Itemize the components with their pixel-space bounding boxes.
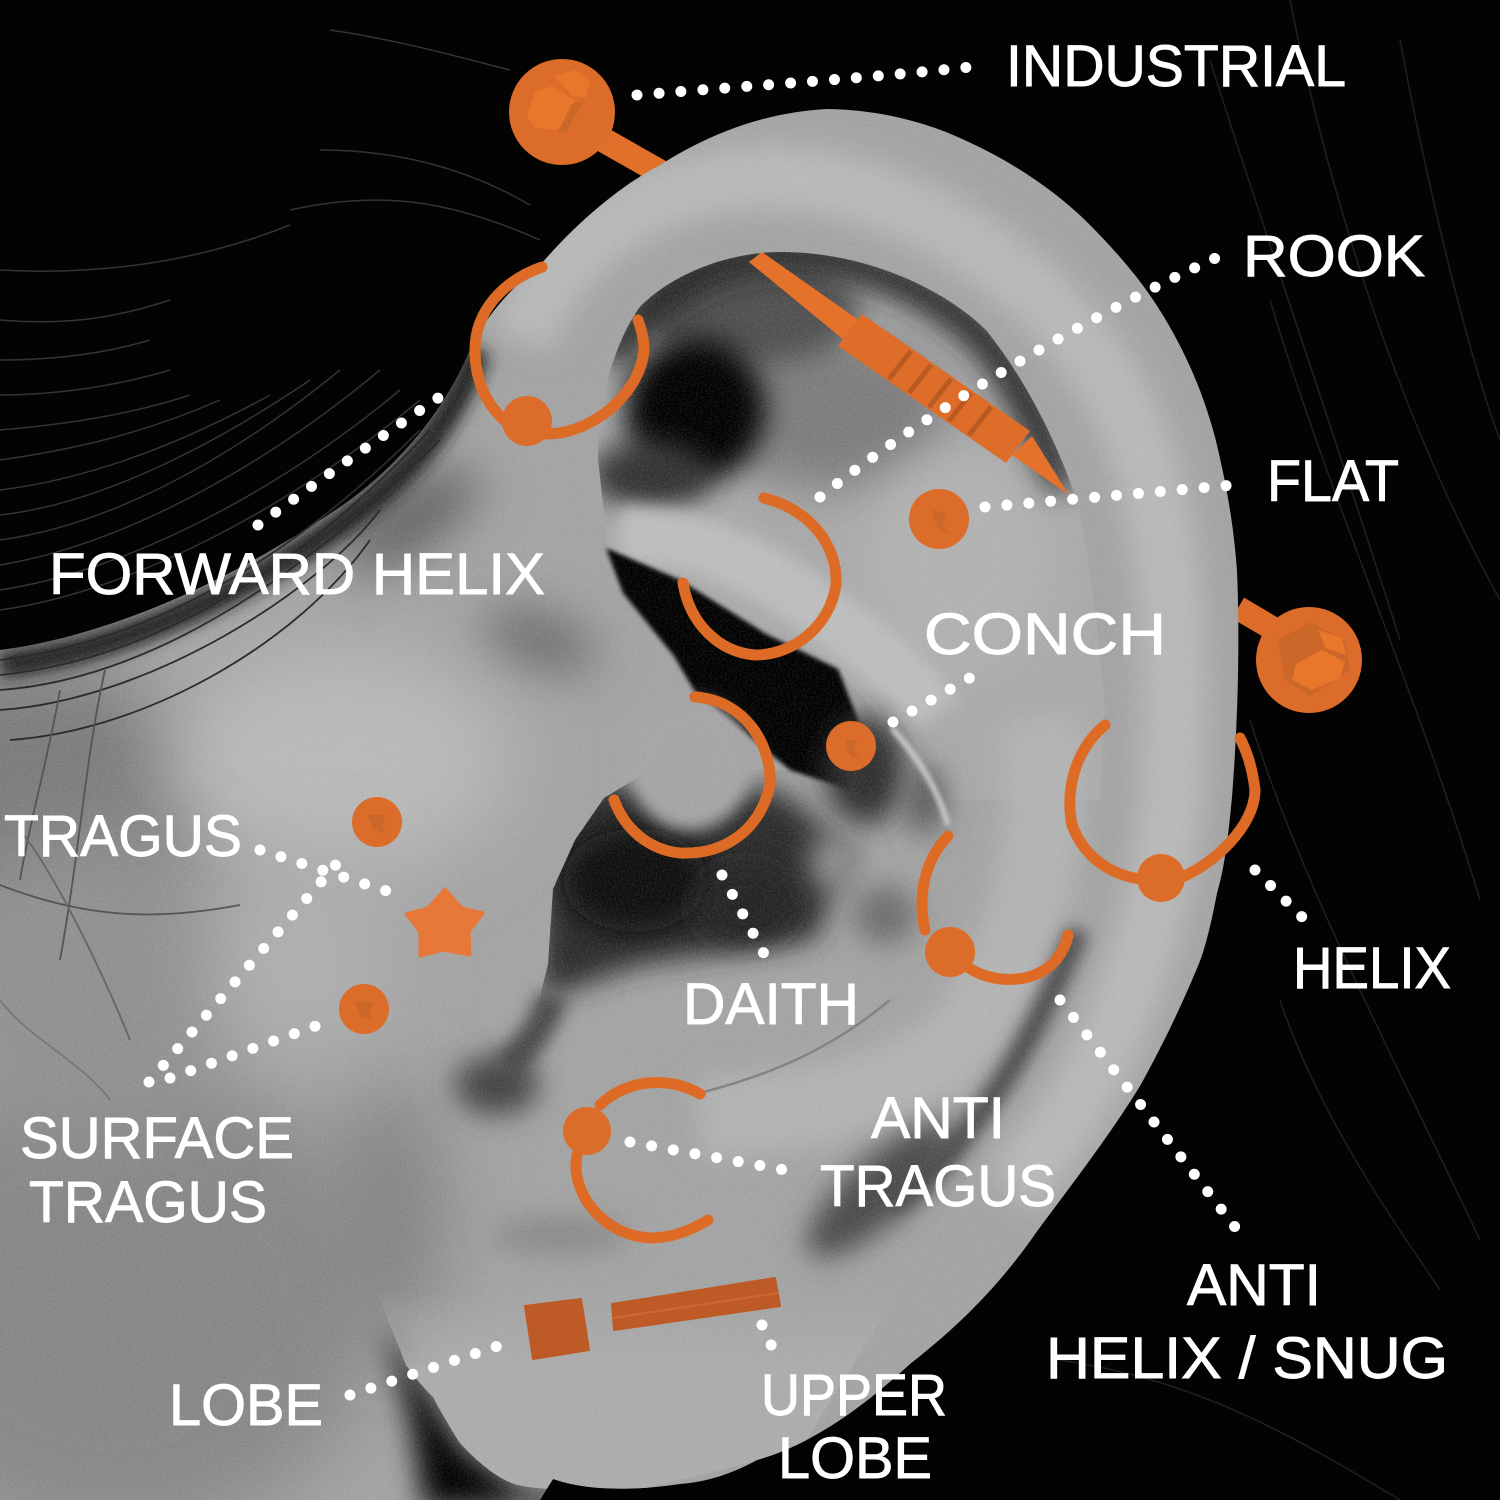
tip (1012, 436, 1069, 495)
label: anti helix / snug: ANTI (1187, 1253, 1321, 1318)
label: upper lobe: LOBE (778, 1426, 932, 1491)
ear and face skin (0, 109, 1238, 1500)
label: anti helix / snug (1046, 1253, 1448, 1391)
piercing: star stud (406, 889, 483, 956)
piercing: forward helix ring (475, 267, 644, 446)
skin grain (0, 109, 1237, 1500)
label: surface tragus: TRAGUS (29, 1170, 267, 1235)
industrial bar through ear (749, 252, 1069, 495)
label: daith: DAITH (683, 972, 859, 1037)
wedge between lobe and neck (373, 1326, 547, 1500)
label: tragus: TRAGUS (4, 804, 242, 869)
piercing: anti tragus ring (563, 1082, 708, 1238)
label: surface tragus (20, 1106, 294, 1235)
crease into antitragus (700, 1000, 890, 1093)
hair strands: top left (0, 30, 540, 610)
label: flat: FLAT (1267, 449, 1399, 514)
piercing: flat stud (909, 489, 969, 549)
piercing: snug ring (922, 836, 1068, 979)
lobe (384, 1310, 854, 1489)
hairline shadow (0, 350, 478, 665)
lighter patch in conch (809, 832, 861, 892)
piercing: tragus stud (352, 797, 402, 847)
piercing: lobe square (525, 1299, 589, 1359)
label: rook: ROOK (1243, 224, 1425, 289)
shadow from cavity to tragus base (455, 995, 552, 1115)
helix rim highlight (520, 177, 1174, 1190)
stem (1238, 608, 1282, 634)
piercing: surface tragus stud (339, 984, 389, 1034)
helix groove (890, 930, 1078, 1205)
upper ball of the industrial bar (509, 59, 660, 172)
label: anti tragus: ANTI (871, 1086, 1005, 1151)
piercing: helix ring (1070, 725, 1255, 902)
grey top of fossa (640, 254, 860, 366)
label: surface tragus: SURFACE (20, 1106, 294, 1171)
label: anti tragus: TRAGUS (820, 1154, 1056, 1219)
piercing: upper lobe bar (612, 1278, 780, 1330)
label: anti helix / snug: HELIX / SNUG (1046, 1326, 1448, 1391)
leader dots (149, 66, 1310, 1395)
shadow around conch stud (825, 715, 905, 825)
conch cavity, crisp on the tragus side (540, 780, 850, 1000)
black crease under rook (606, 548, 862, 790)
rook fold ridge (620, 535, 935, 715)
highlight along the crus edge (892, 728, 948, 825)
bar (749, 252, 870, 345)
label: upper lobe (761, 1363, 947, 1491)
dark band under helix (610, 255, 1060, 490)
label: helix: HELIX (1293, 936, 1451, 1001)
threaded tube (838, 314, 1030, 463)
label: lobe: LOBE (169, 1373, 323, 1438)
inner ear, clipped at helix inner edge (598, 252, 1074, 736)
scapha base (590, 240, 1120, 820)
dark fossa (625, 338, 765, 482)
stem (600, 138, 660, 172)
piercing: daith ring (614, 697, 770, 853)
label: anti tragus (820, 1086, 1056, 1219)
hair strands over skin (0, 430, 440, 1100)
label: upper lobe: UPPER (761, 1363, 947, 1428)
face shading (0, 648, 202, 895)
piercing: conch stud (826, 721, 876, 771)
label: forward helix: FORWARD HELIX (49, 542, 545, 607)
label: industrial: INDUSTRIAL (1006, 34, 1346, 99)
piercing: rook ring (683, 498, 836, 655)
antihelix (700, 720, 1044, 1120)
crus end (628, 699, 752, 831)
light area beside flat stud (877, 441, 1061, 611)
lobe crease (490, 1217, 630, 1253)
lower ball of the industrial bar (1238, 607, 1362, 713)
hair strands: right side (1060, 0, 1500, 1500)
label: conch: CONCH (924, 602, 1166, 667)
